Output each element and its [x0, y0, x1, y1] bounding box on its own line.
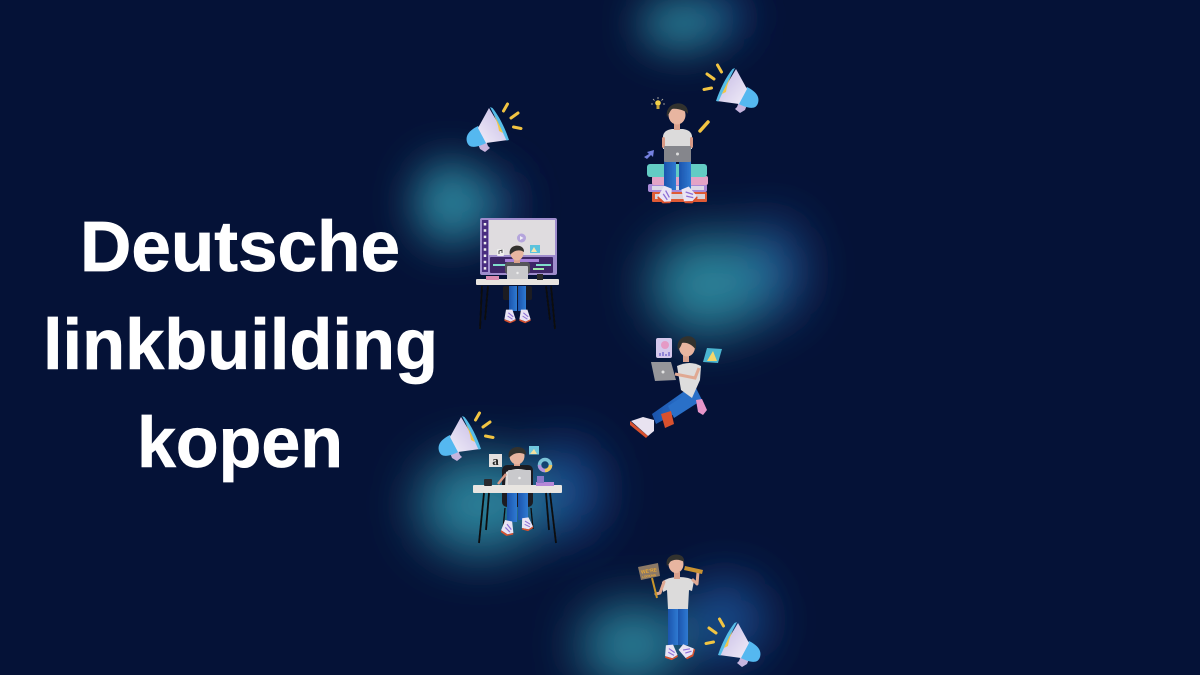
glow: centre right: [650, 222, 802, 335]
glow: lower left: [418, 444, 601, 555]
glow: top: [640, 0, 746, 50]
figure: person on books: [644, 97, 708, 206]
title: [43, 208, 438, 483]
icon: megaphone lower left: [439, 413, 493, 461]
glow: bottom: [580, 580, 765, 675]
figure: person with sign and telescope: WE'RE: [641, 567, 658, 576]
figure: person with sign and telescope: LOOKING: [642, 573, 657, 579]
figure: floating person with laptop: [630, 336, 722, 438]
title: linkbuilding: [43, 306, 438, 385]
icon: megaphone upper left: [467, 104, 521, 152]
icon: letter tile: a: [492, 453, 499, 468]
icon: megaphone top right: [704, 65, 758, 113]
figure: person with sign and telescope: [638, 555, 703, 661]
figure: person at video editing desk: [476, 218, 559, 329]
icon: megaphone bottom right: [706, 619, 760, 667]
title: kopen: [137, 404, 343, 483]
glow: upper left: [414, 161, 520, 245]
figure: person at desk: [473, 446, 562, 543]
title: Deutsche: [80, 208, 400, 287]
